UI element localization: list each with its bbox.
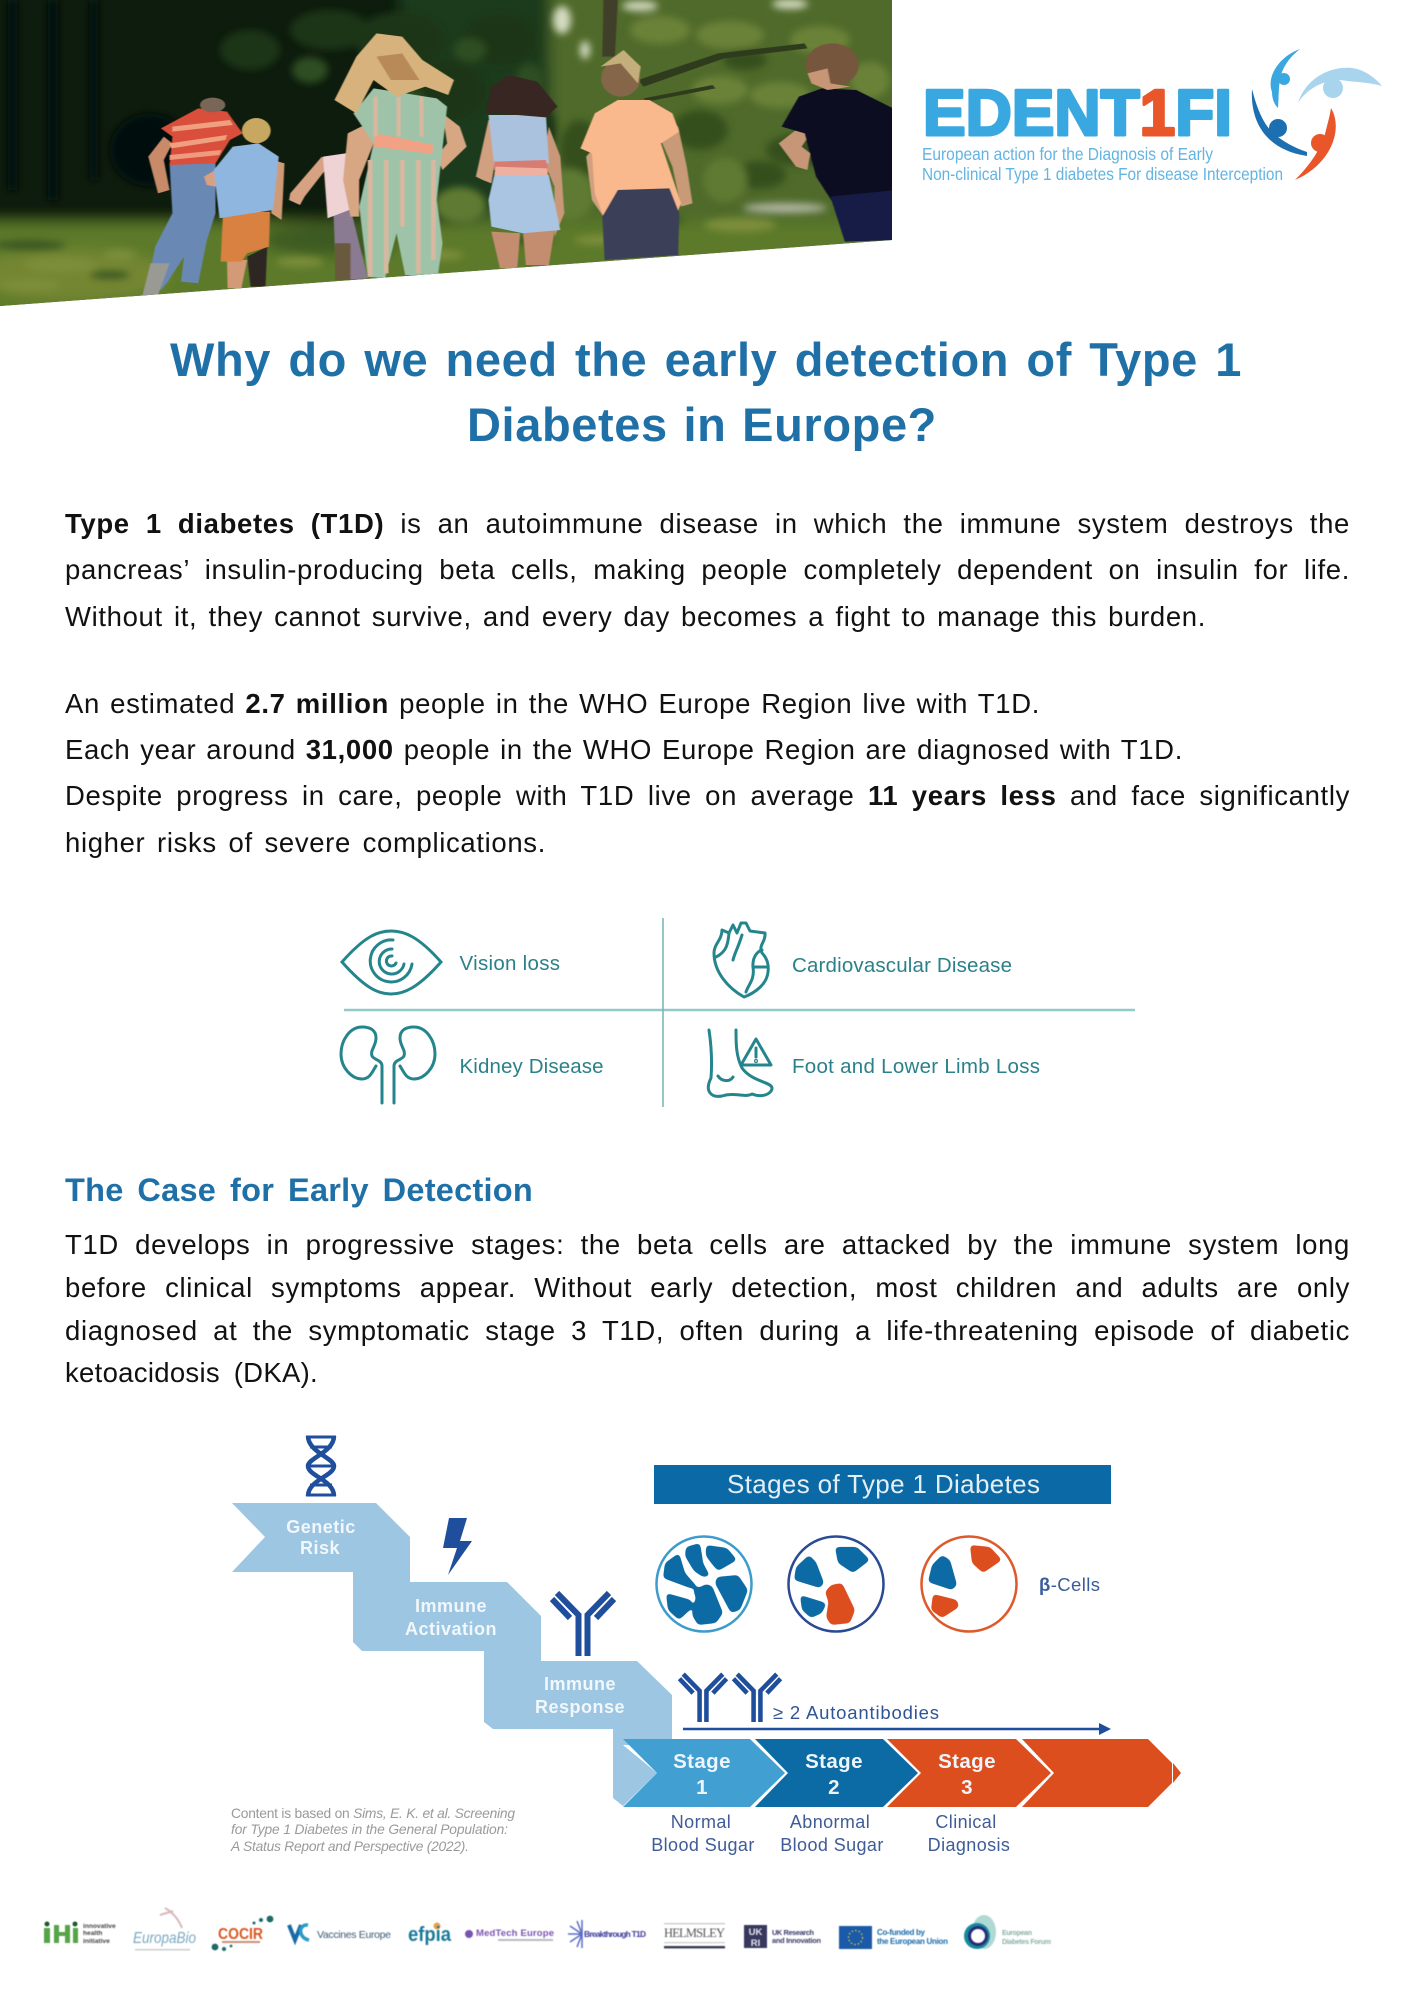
stair ribbon: [232, 1503, 672, 1806]
text block: early detection: diagnosed at the symptomatic stage 3 T1D, often during a life-threatening episode of diabetic: [65, 1315, 1350, 1346]
label: vision loss: Vision loss: [460, 952, 560, 975]
source note: Content is based on Sims, E. K. et al. Screening: [231, 1806, 515, 1821]
kid 4: [343, 123, 374, 217]
text block: T1D statistics: higher risks of severe complications.: [65, 827, 546, 858]
heading: the case for early detection: The Case for Early Detection: [65, 1172, 533, 1208]
arrow tip: [1173, 1763, 1181, 1783]
step labels: Genetic: [286, 1517, 356, 1537]
logo: UKRI: and Innovation: [772, 1936, 821, 1945]
stages header bar: [654, 1465, 1111, 1504]
icon: heart: [714, 923, 768, 997]
step labels: Immune: [544, 1674, 616, 1694]
step labels: Immune: [415, 1596, 487, 1616]
title: Why do we need the early detection of Type 1: [170, 333, 1242, 386]
kid 3: [333, 208, 368, 280]
stage labels: Stage: [938, 1750, 996, 1773]
text block: T1D statistics: An estimated 2.7 million people in the WHO Europe Region live with T1D.: [65, 688, 1040, 719]
kid 2: [227, 260, 247, 288]
logo: COCIR: [212, 1916, 273, 1951]
stage labels: 2: [828, 1776, 840, 1799]
title: Diabetes in Europe?: [467, 398, 937, 451]
logo: innovative health initiative: [44, 1922, 116, 1945]
stage 1 chevron: [623, 1739, 785, 1807]
logo: UKRI: RI: [751, 1938, 760, 1949]
logo: co-funded by the European Union: [839, 1926, 948, 1949]
step labels: Response: [535, 1697, 625, 1717]
beta cells label: β-Cells: [1039, 1574, 1100, 1595]
blood sugar labels: Abnormal: [790, 1812, 870, 1832]
source note: for Type 1 Diabetes in the General Population:: [231, 1822, 508, 1837]
blood sugar labels: Blood Sugar: [651, 1835, 755, 1855]
logo tagline: [922, 144, 1283, 184]
icon: eye: [342, 931, 441, 994]
logo: European Diabetes Forum: Diabetes Forum: [1002, 1939, 1051, 1946]
stage 3 chevron: [887, 1739, 1051, 1807]
logo: EDENT1FI: [922, 49, 1382, 184]
header photo: children running: [0, 0, 892, 306]
text block: T1D statistics: [65, 688, 1350, 858]
kid 6: [661, 120, 693, 207]
logo: efpia: efpia: [408, 1924, 452, 1946]
beta cells circle 1: [656, 1536, 752, 1632]
logo: Helmsley: [664, 1923, 725, 1948]
logo: COCIR: COCIR: [218, 1926, 263, 1943]
panel: complications: [340, 918, 1135, 1107]
logo: innovative health initiative: innovative: [83, 1923, 116, 1930]
logo: Breakthrough T1D: Breakthrough T1D: [584, 1929, 646, 1939]
icon: two antibodies: [679, 1674, 781, 1722]
kid 1: [151, 163, 216, 290]
logo: MedTech Europe: MedTech Europe: [476, 1928, 554, 1939]
stage labels: 3: [961, 1776, 973, 1799]
text block: T1D statistics: Despite progress in care, people with T1D live on average 11 years less and face significantly: [65, 780, 1350, 811]
icon: foot with warning: [708, 1030, 772, 1096]
logo: innovative health initiative: health: [83, 1930, 102, 1937]
logo: innovative health initiative: initiative: [83, 1938, 110, 1945]
blood sugar labels: Clinical: [935, 1812, 997, 1832]
logo figures: [1252, 49, 1382, 180]
source note: A Status Report and Perspective (2022).: [230, 1839, 469, 1854]
logo: EuropaBio: [133, 1908, 196, 1950]
logo: UKRI: UK: [749, 1927, 762, 1938]
label: foot and lower limb loss: Foot and Lower Limb Loss: [792, 1055, 1040, 1078]
stage 2 chevron: [755, 1739, 918, 1807]
text block: what is T1D: Without it, they cannot survive, and every day becomes a fight to manage this burden.: [65, 601, 1206, 632]
logo: UKRI: [744, 1925, 821, 1949]
stage labels: [673, 1750, 996, 1799]
blood sugar labels: [651, 1812, 1010, 1855]
logo: European Diabetes Forum: European: [1002, 1930, 1032, 1937]
logo: co-funded by the European Union: the European Union: [877, 1937, 948, 1946]
logo: UKRI: UK Research: [772, 1928, 814, 1937]
text block: early detection: T1D develops in progressive stages: the beta cells are attacked by the immune system long: [65, 1229, 1350, 1260]
logo: Vaccines Europe: Vaccines Europe: [317, 1929, 391, 1941]
logo: Vaccines Europe: [289, 1925, 391, 1941]
logo: Helmsley: HELMSLEY: [664, 1926, 725, 1940]
step labels: [286, 1517, 625, 1717]
text block: early detection: [65, 1229, 1350, 1388]
kid 7: [779, 130, 810, 170]
step labels: Activation: [405, 1619, 497, 1639]
tree trunks: [602, 0, 618, 57]
label: cardiovascular disease: Cardiovascular Disease: [792, 954, 1012, 977]
blood sugar labels: Blood Sugar: [780, 1835, 884, 1855]
icon: lightning bolt: [443, 1518, 472, 1575]
text block: early detection: ketoacidosis (DKA).: [65, 1357, 318, 1388]
title: [170, 333, 1242, 451]
text block: what is T1D: pancreas’ insulin-producing beta cells, making people completely dependent on insulin for life.: [65, 554, 1350, 585]
stage labels: 1: [696, 1776, 708, 1799]
source note: [230, 1806, 515, 1854]
text block: early detection: before clinical symptoms appear. Without early detection, most children and adults are only: [65, 1272, 1350, 1303]
logo tagline: Non-clinical Type 1 diabetes For disease Interception: [922, 164, 1283, 184]
text block: what is T1D: [65, 508, 1350, 632]
arrow: [683, 1723, 1111, 1735]
logo: EuropaBio: EuropaBio: [133, 1930, 196, 1947]
logo wordmark: EDENT1FI: [923, 76, 1232, 149]
kid 5: [491, 232, 520, 268]
step labels: Risk: [300, 1538, 340, 1558]
icon: antibody: [552, 1593, 614, 1656]
logo: European Diabetes Forum: [964, 1915, 1051, 1949]
logo tagline: European action for the Diagnosis of Early: [922, 144, 1213, 164]
text block: what is T1D: Type 1 diabetes (T1D) is an autoimmune disease in which the immune system destroys the: [65, 508, 1350, 539]
stages header text: Stages of Type 1 Diabetes: [727, 1469, 1040, 1499]
blood sugar labels: Normal: [671, 1812, 731, 1832]
autoantibodies label: ≥ 2 Autoantibodies: [773, 1702, 939, 1723]
stage labels: Stage: [673, 1750, 731, 1773]
final chevron: [1022, 1739, 1172, 1807]
beta cells circle 2: [788, 1536, 884, 1632]
beta cells circle 3: [922, 1536, 1016, 1632]
text block: T1D statistics: Each year around 31,000 people in the WHO Europe Region are diagnosed with T1D.: [65, 734, 1183, 765]
blood sugar labels: Diagnosis: [928, 1835, 1010, 1855]
label: kidney disease: Kidney Disease: [460, 1055, 604, 1078]
icon: kidneys: [341, 1027, 435, 1103]
logo: co-funded by the European Union: Co-funded by: [877, 1928, 926, 1937]
stage labels: Stage: [805, 1750, 863, 1773]
icon: dna: [306, 1436, 336, 1496]
logo: Breakthrough T1D: [568, 1920, 646, 1948]
